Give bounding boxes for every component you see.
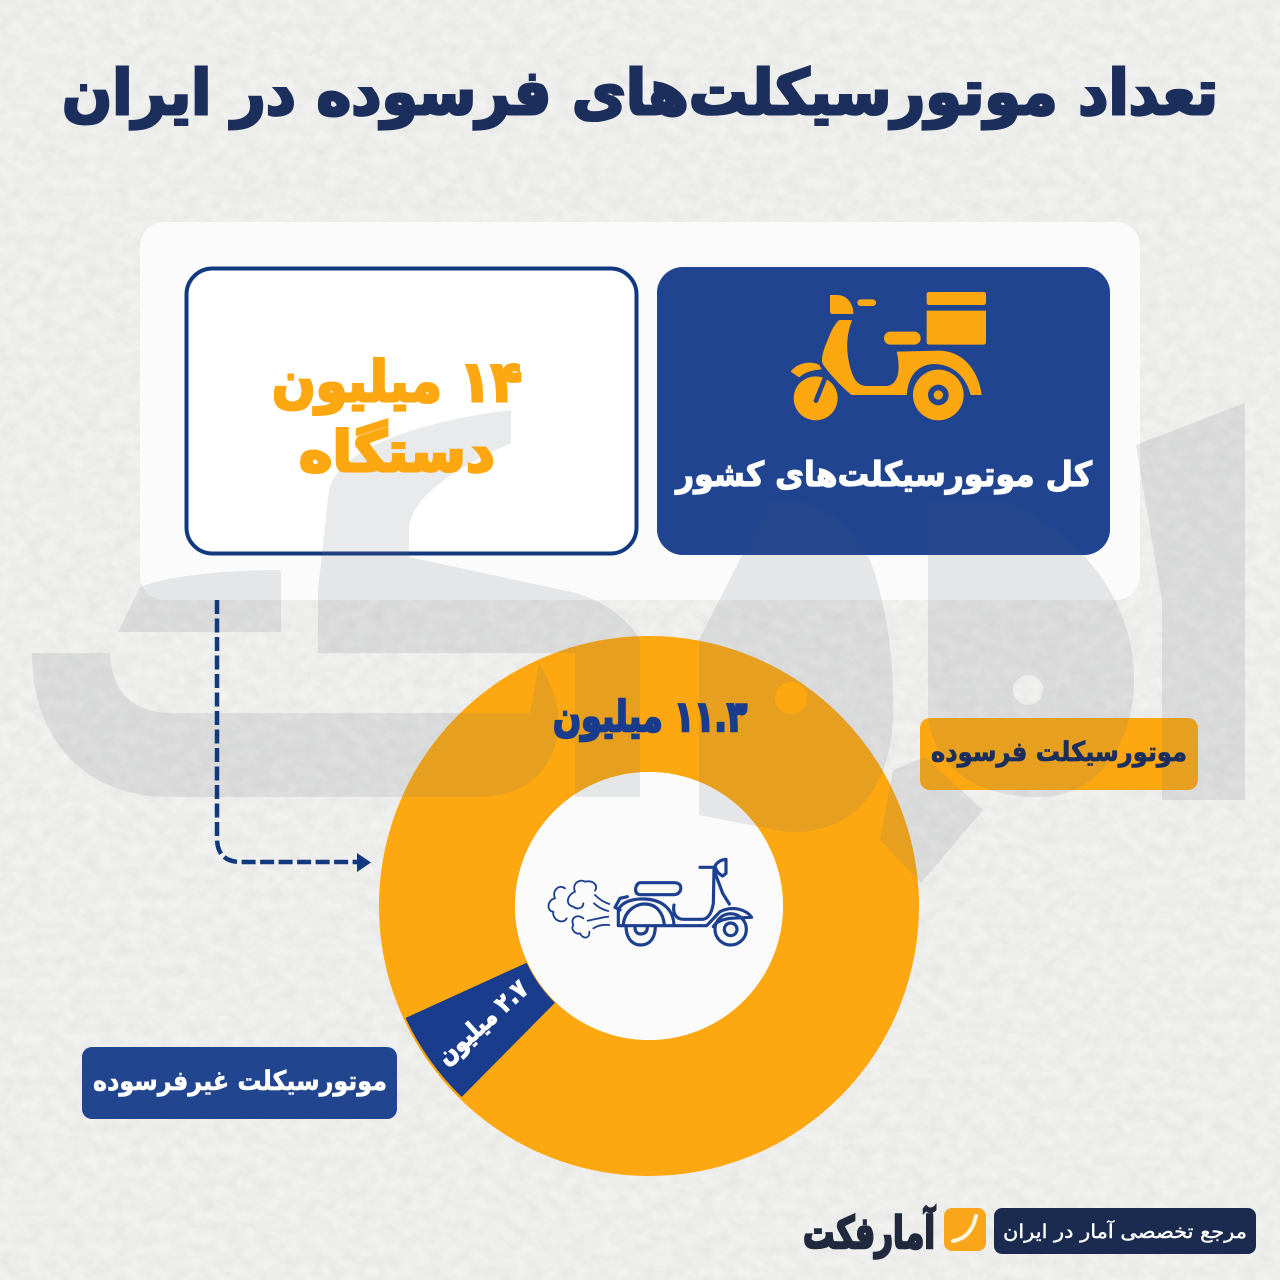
donut segment: worn-out <box>447 704 851 1108</box>
watermark logo <box>32 403 1245 883</box>
icon: old scooter with smoke <box>549 859 752 945</box>
donut centre <box>515 772 783 1040</box>
value line one: ۱۴ میلیون <box>272 350 522 415</box>
legend text: worn-out: موتورسیکلت فرسوده <box>931 737 1187 768</box>
title: تعداد موتورسیکلت‌های فرسوده در ایران <box>62 56 1218 129</box>
logo wordmark: آمارفکت <box>803 1205 936 1259</box>
footer tagline badge: مرجع تخصصی آمار در ایران <box>1003 1219 1247 1243</box>
legend: not worn-out: موتورسیکلت غیرفرسوده <box>93 1066 387 1097</box>
donut segment: not worn-out <box>406 963 555 1097</box>
value: 11.3 million: ۱۱.۳ میلیون <box>553 692 747 742</box>
card: total label background <box>657 267 1110 555</box>
legend box: worn-out <box>920 718 1198 790</box>
donut chart <box>406 704 851 1108</box>
card label text: کل موتورسیکلت‌های کشور <box>674 455 1092 495</box>
legend: not worn-out <box>82 1047 397 1119</box>
footer: brand <box>803 1205 1256 1259</box>
footer tagline badge <box>994 1208 1256 1254</box>
icon: delivery scooter <box>791 292 986 420</box>
panel: total motorcycles <box>140 222 1140 600</box>
arrow: dashed connector to donut <box>217 600 371 872</box>
value: 2.7 million: ۲.۷ میلیون <box>431 974 534 1071</box>
card tint over watermark <box>657 267 1110 555</box>
logo mark <box>944 1208 986 1251</box>
value line two: دستگاه <box>299 420 495 485</box>
card: total value background <box>186 268 636 554</box>
